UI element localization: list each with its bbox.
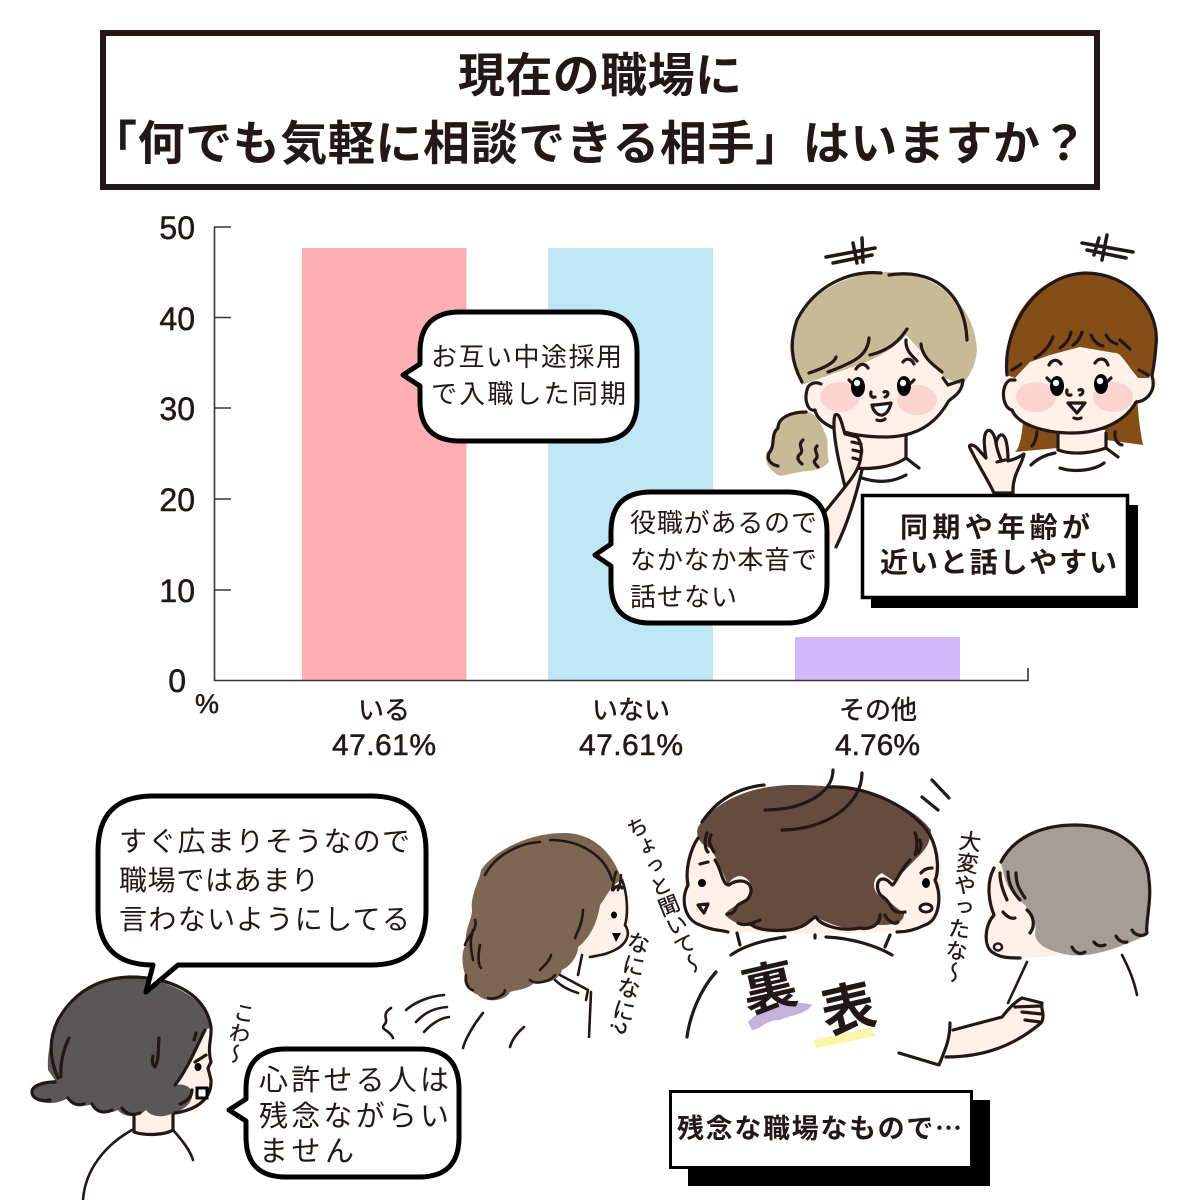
- mouth: [1068, 403, 1085, 413]
- illustration: blonde girl: [766, 238, 977, 548]
- caption box: easy to talk: [862, 496, 1138, 608]
- bar: いない: [548, 248, 713, 680]
- mouth: [872, 403, 891, 415]
- hair: [790, 272, 977, 385]
- speech bubble: keep quiet at work: [98, 796, 426, 992]
- arm: [946, 1000, 1043, 1057]
- shirt paint: yellow: [813, 1028, 876, 1048]
- x label: いる: いる: [358, 695, 410, 725]
- left face: [700, 862, 708, 864]
- motion lines: [383, 995, 449, 1038]
- eyes: [851, 376, 911, 397]
- y axis labels: 0: [168, 663, 186, 699]
- eyes: [1050, 374, 1108, 396]
- body lines: [1008, 955, 1137, 1003]
- bar: その他: [795, 637, 960, 680]
- y axis labels: 40: [159, 301, 195, 337]
- y axis labels: 10: [159, 573, 195, 609]
- axes and ticks: [214, 227, 1028, 680]
- x label: いない: 47.61%: [579, 729, 683, 762]
- x label: その他: 4.76%: [835, 729, 920, 762]
- x label: その他: [835, 695, 920, 762]
- eye and mouth: [195, 1055, 206, 1062]
- speech bubble: same-year colleague: で入職した同期: [431, 379, 626, 409]
- hair strands: [765, 770, 862, 830]
- illustration: wavy-haired woman: [383, 833, 652, 1048]
- speech bubble: nobody to trust: [229, 1049, 459, 1177]
- speech bubble: keep quiet at work: すぐ広まりそうなので: [119, 826, 410, 857]
- x label: いる: [332, 695, 436, 762]
- face: [806, 337, 962, 437]
- face skin: [686, 800, 942, 934]
- x label: いない: [579, 695, 683, 762]
- right face: [921, 868, 932, 873]
- speech bubble: hard to be honest: 役職があるので: [630, 508, 817, 538]
- x label: その他: その他: [839, 695, 917, 725]
- hair: [1006, 273, 1157, 378]
- speech bubble: keep quiet at work: 言わないようにしてる: [119, 904, 410, 935]
- lines: [32, 977, 211, 1114]
- lines: [986, 825, 1150, 958]
- y axis labels: 30: [159, 391, 195, 427]
- illustration: dark-haired woman: [32, 977, 256, 1200]
- speech bubble: hard to be honest: [595, 492, 827, 623]
- bar: いる: [302, 248, 466, 680]
- caption box: easy to talk: 近いと話しやすい: [880, 547, 1117, 578]
- neck: [134, 1110, 173, 1134]
- speech bubble: hard to be honest: 話せない: [630, 582, 737, 612]
- y axis labels: [159, 210, 195, 699]
- speech bubble: nobody to trust: 残念ながらい: [259, 1100, 449, 1133]
- back hair: [1015, 395, 1143, 452]
- whisper: 大変やったな〜: 大変やったな〜: [939, 828, 982, 985]
- whisper: ちょっと聞いて〜: ちょっと聞いて〜: [621, 814, 706, 978]
- speech bubble: nobody to trust: ません: [259, 1136, 354, 1168]
- unit: %: [195, 689, 219, 719]
- ears: [734, 873, 752, 899]
- speech bubble: keep quiet at work: 職場ではあまり: [119, 865, 319, 896]
- raised hand: [970, 430, 1024, 493]
- face and hair lines: [792, 273, 967, 437]
- x label: いない: いない: [592, 695, 670, 725]
- face: [570, 878, 629, 960]
- surprise lines: [922, 780, 949, 810]
- arm: [815, 470, 862, 548]
- eye and mouth: [613, 886, 622, 890]
- shirt lines: [687, 933, 950, 1065]
- hair: [1000, 825, 1150, 955]
- surprise marks: [826, 238, 875, 263]
- face: [986, 860, 1075, 958]
- title box: 現在の職場に: [458, 49, 742, 102]
- hand with finger: [834, 415, 862, 487]
- ponytail: [766, 411, 829, 476]
- bar chart: [159, 210, 1028, 762]
- hair: [32, 977, 212, 1116]
- caption box: unfortunate workplace: 残念な職場なもので…: [677, 1107, 962, 1146]
- y axis labels: 20: [159, 482, 195, 518]
- shirt text: 裏: 裏: [736, 954, 803, 1024]
- speech bubble: same-year colleague: お互い中途採用: [431, 342, 622, 372]
- caption box: easy to talk: 同期や年齢が: [900, 511, 1090, 543]
- face: [160, 1025, 213, 1112]
- illustration: grey-haired woman: [986, 825, 1150, 1003]
- surprise marks: [1082, 235, 1133, 260]
- whisper: こわ〜: こわ〜: [221, 1000, 256, 1066]
- blush: [820, 382, 860, 412]
- lines: [1003, 273, 1156, 433]
- illustration: man seen from behind: [621, 770, 1043, 1065]
- y axis labels: 50: [159, 210, 195, 246]
- speech bubble: same-year colleague: [403, 312, 637, 441]
- caption box: unfortunate workplace: [670, 1092, 990, 1186]
- lines: [465, 840, 628, 1000]
- outline strokes: [684, 785, 939, 932]
- speech bubble: nobody to trust: 心許せる人は: [259, 1064, 449, 1097]
- title box: 「何でも気軽に相談できる相手」はいますか？: [90, 117, 1088, 170]
- neck: [852, 433, 906, 469]
- neck: [1058, 433, 1106, 453]
- body: [83, 1130, 193, 1200]
- illustration: brown-haired girl: [970, 235, 1157, 493]
- body lines: [463, 992, 591, 1048]
- hair: [697, 785, 931, 930]
- face: [1003, 348, 1157, 433]
- reply: なになに？: なになに?: [604, 928, 652, 1036]
- x label: いる: 47.61%: [332, 729, 436, 762]
- speech bubble: hard to be honest: なかなか本音で: [630, 545, 817, 575]
- hair: [462, 833, 622, 1000]
- title box: [90, 33, 1097, 187]
- shirt text: 表: 表: [815, 975, 882, 1045]
- shirt paint: purple: [748, 1003, 812, 1030]
